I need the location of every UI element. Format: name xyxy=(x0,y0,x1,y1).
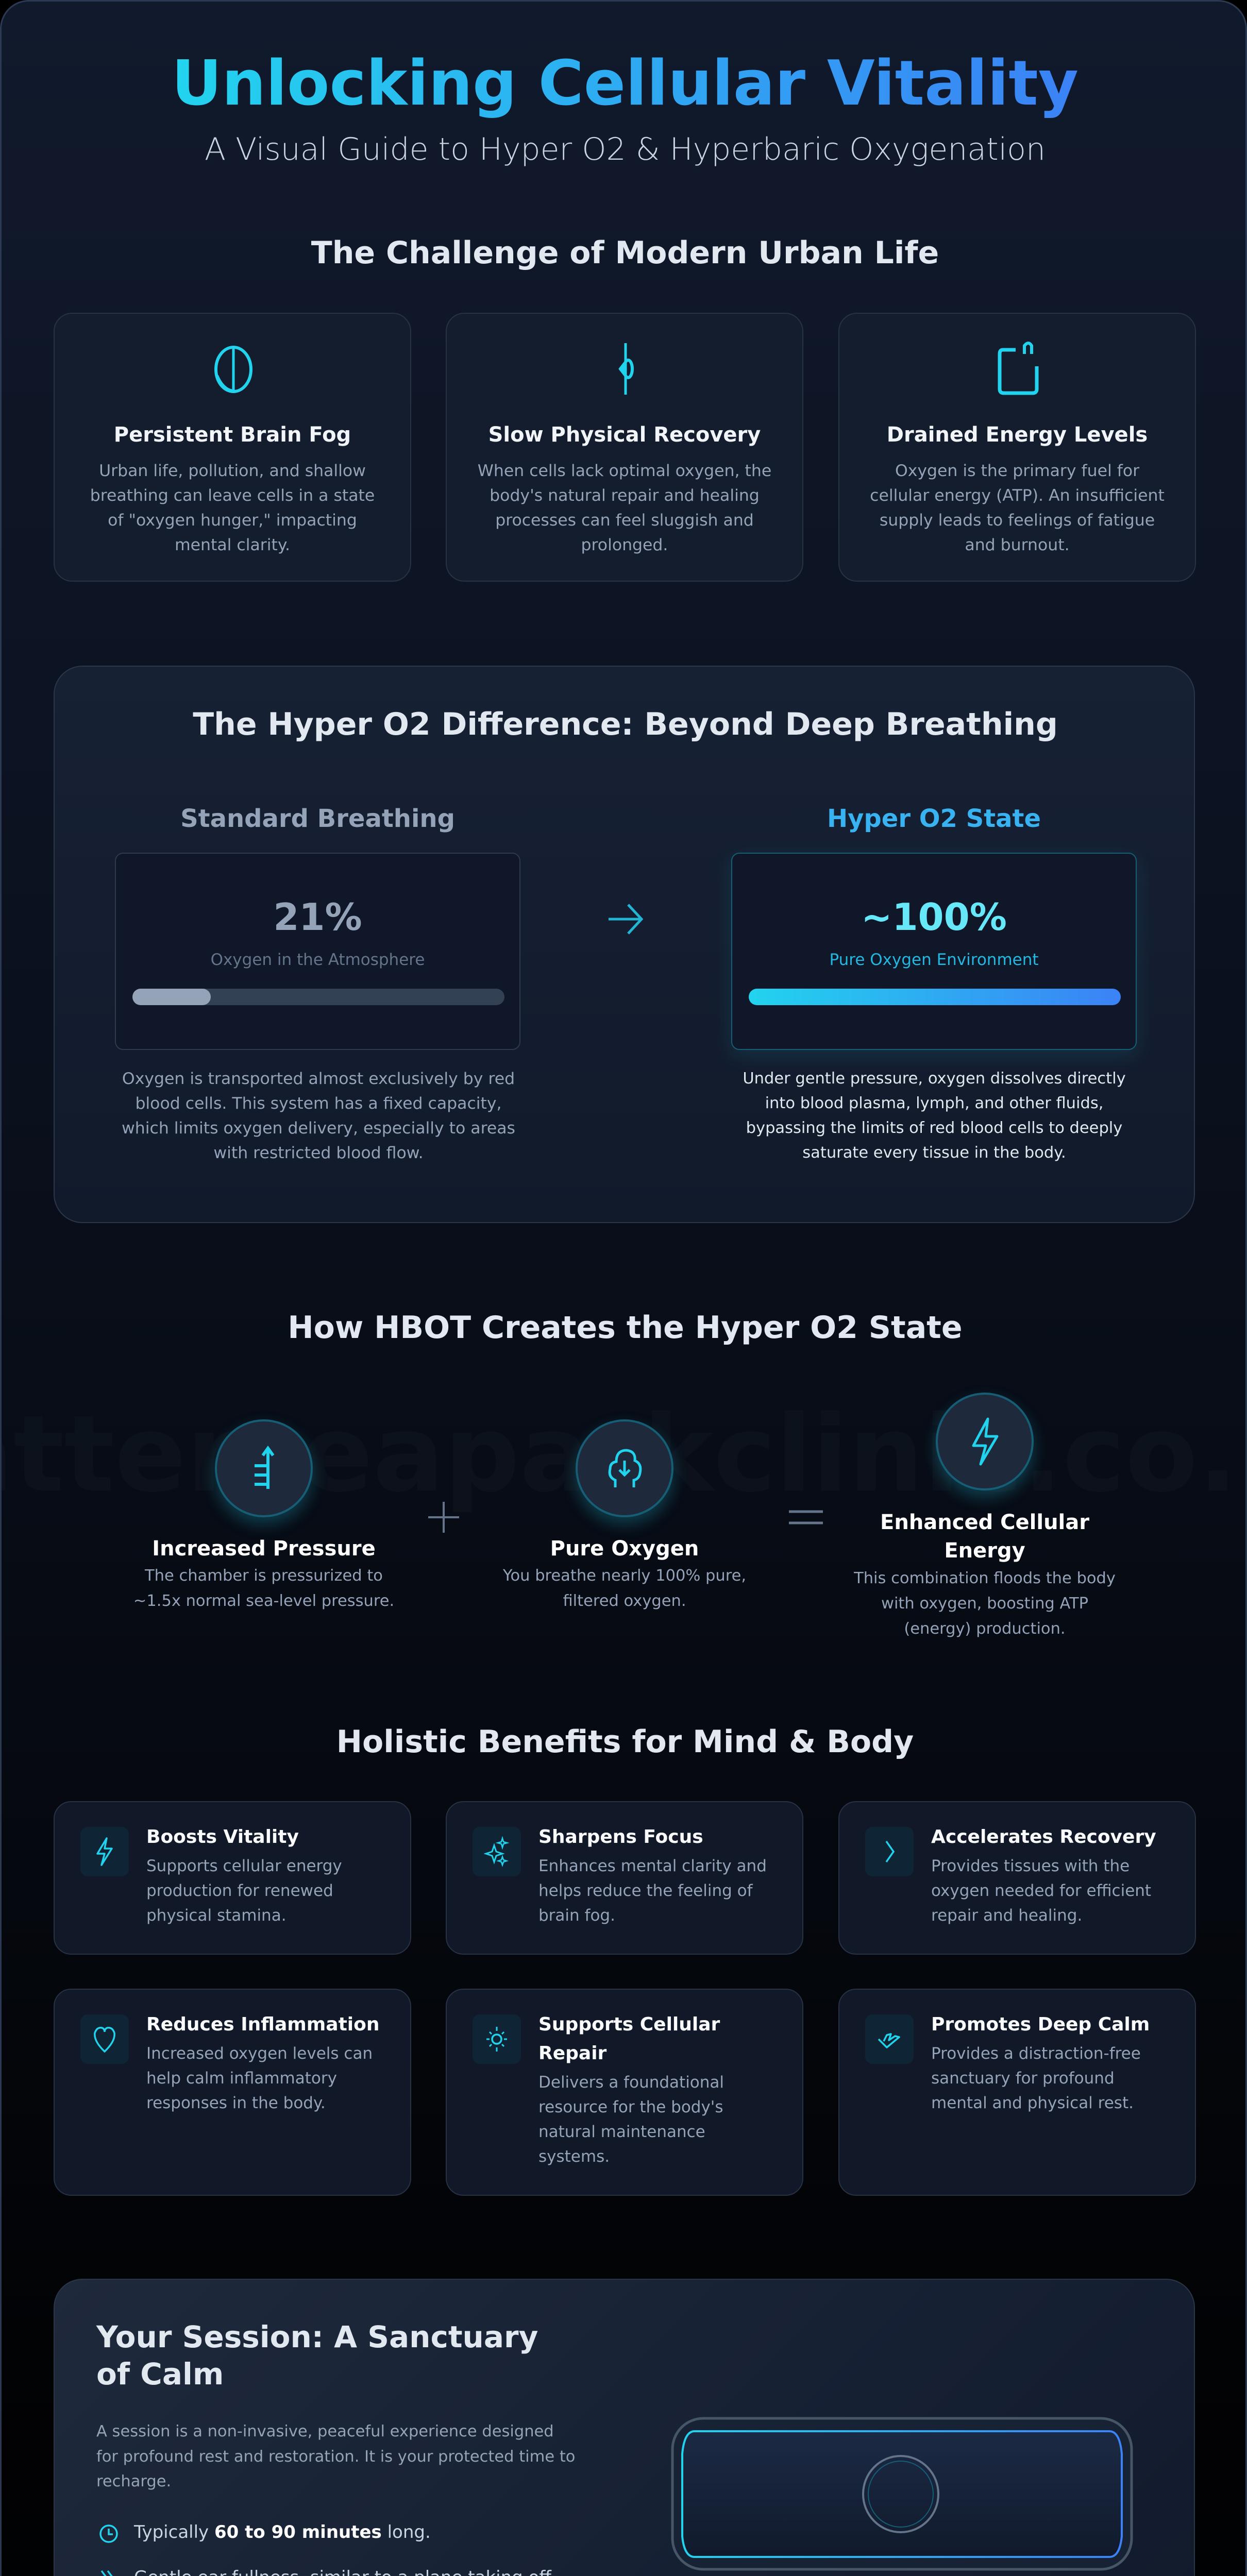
icon: sun xyxy=(473,2014,521,2064)
text: session intro: A session is a non-invasive, peaceful experience designed for profound rest and restoration. It is your protected time to recharge. xyxy=(96,2422,575,2490)
icon: drained battery xyxy=(998,342,1039,395)
step title: Increased Pressure xyxy=(152,1537,376,1561)
benefit: cellular repair xyxy=(446,1989,803,2196)
benefit: recovery xyxy=(838,1801,1196,1955)
benefit text xyxy=(538,2014,724,2166)
step text: This combination floods the body with oxygen, boosting ATP (energy) production. xyxy=(854,1569,1116,1638)
heading: challenge: The Challenge of Modern Urban Life xyxy=(311,235,939,271)
stat box: hyper xyxy=(731,853,1137,1050)
benefit text xyxy=(538,1826,767,1925)
panel: session xyxy=(54,2279,1195,2576)
card title: Persistent Brain Fog xyxy=(114,423,351,447)
step: oxygen xyxy=(503,1419,746,1610)
benefit: inflammation xyxy=(54,1989,411,2196)
icon: clock xyxy=(99,2524,118,2543)
operator: plus xyxy=(428,1502,459,1533)
arrow xyxy=(609,904,643,935)
step title: Pure Oxygen xyxy=(550,1537,699,1561)
heading: difference: The Hyper O2 Difference: Beyond Deep Breathing xyxy=(193,706,1058,742)
title: Unlocking Cellular Vitality xyxy=(172,48,1079,120)
subtitle: A Visual Guide to Hyper O2 & Hyperbaric Oxygenation xyxy=(205,131,1046,167)
card text: When cells lack optimal oxygen, the body's natural repair and healing processes can feel sluggish and prolonged. xyxy=(478,462,771,554)
step text: The chamber is pressurized to ~1.5x normal sea-level pressure. xyxy=(133,1567,394,1610)
benefit text xyxy=(146,1826,342,1925)
benefit: focus xyxy=(446,1801,803,1955)
benefit: vitality xyxy=(54,1801,411,1955)
stat label: Oxygen in the Atmosphere xyxy=(211,951,425,969)
icon: double chevron xyxy=(98,2569,119,2576)
benefit text: Boosts Vitality xyxy=(146,1826,299,1848)
card text: supply leads to feelings of fatigue xyxy=(880,511,1155,530)
card text: Urban life, pollution, and shallow breathing can leave cells in a state of "oxygen hunger," impacting mental clarity. xyxy=(90,462,375,554)
benefit text: mental and physical rest. xyxy=(931,2094,1134,2112)
heading: session: Your Session: A Sanctuary of Calm xyxy=(96,2319,538,2392)
icon: recovery xyxy=(618,343,634,395)
card text: Oxygen is the primary fuel for xyxy=(895,462,1139,480)
panel: hyper o2 difference xyxy=(54,666,1195,1223)
heading: how hbot: How HBOT Creates the Hyper O2 State xyxy=(288,1310,963,1346)
card title: Slow Physical Recovery xyxy=(488,423,761,447)
icon: brain fog xyxy=(214,346,252,393)
benefit text: Provides tissues with the oxygen needed for efficient repair and healing. xyxy=(931,1857,1151,1925)
icon: bolt xyxy=(80,1827,129,1876)
step text: You breathe nearly 100% pure, filtered oxygen. xyxy=(503,1567,746,1610)
benefit text: Reduces Inflammation xyxy=(146,2014,379,2035)
benefit text: Supports Cellular Repair xyxy=(538,2014,720,2064)
step: energy xyxy=(854,1393,1116,1638)
stat label: Pure Oxygen Environment xyxy=(829,951,1039,969)
list item: duration: Typically 60 to 90 minutes long. xyxy=(134,2522,431,2543)
text: hyper: Under gentle pressure, oxygen dissolves directly into blood plasma, lymph, and other fluids, bypassing the limits of red blood cells to deeply saturate every tissue in the body. xyxy=(743,1070,1126,1162)
benefit text xyxy=(931,1826,1156,1925)
benefit text xyxy=(146,2014,379,2112)
icon: chevron xyxy=(865,1827,914,1876)
icon: cloud oxygen xyxy=(576,1419,673,1517)
card text: cellular energy (ATP). An insufficient xyxy=(870,486,1165,505)
card title: Drained Energy Levels xyxy=(887,423,1148,447)
benefit text xyxy=(931,2014,1150,2112)
bar xyxy=(749,989,1121,1005)
benefit text: Increased oxygen levels can help calm inflammatory responses in the body. xyxy=(146,2044,373,2112)
benefit text: Sharpens Focus xyxy=(538,1826,703,1848)
step title: Enhanced Cellular Energy xyxy=(880,1511,1089,1563)
subheading: standard: Standard Breathing xyxy=(180,804,455,833)
stat value: ~100% xyxy=(861,895,1007,939)
benefit text: Provides a distraction-free xyxy=(931,2044,1141,2063)
benefit text: Delivers a foundational resource for the body's natural maintenance systems. xyxy=(538,2073,724,2166)
icon: hand xyxy=(865,2014,914,2064)
card text xyxy=(870,462,1165,554)
benefit text: sanctuary for profound xyxy=(931,2069,1115,2088)
panel: brain fog card xyxy=(54,313,411,582)
card text: and burnout. xyxy=(965,536,1070,554)
list item: ear xyxy=(96,2564,591,2576)
benefit text: Promotes Deep Calm xyxy=(931,2014,1150,2035)
step: pressure xyxy=(133,1419,394,1610)
icon: sparkles xyxy=(473,1827,521,1876)
icon: heart xyxy=(80,2014,129,2064)
benefit: calm xyxy=(838,1989,1196,2196)
icon: lightning xyxy=(936,1393,1034,1490)
stat box: standard xyxy=(115,853,520,1050)
benefit text: Supports cellular energy production for renewed physical stamina. xyxy=(146,1857,342,1925)
icon: pressure xyxy=(215,1419,313,1517)
benefit text: Accelerates Recovery xyxy=(931,1826,1156,1848)
text: standard: Oxygen is transported almost exclusively by red blood cells. This system has a fixed capacity, which limits oxygen delivery, especially to areas with restricted blood flow. xyxy=(122,1070,515,1162)
heading: benefits: Holistic Benefits for Mind & Body xyxy=(336,1724,914,1760)
panel: drained energy card xyxy=(838,313,1196,582)
illustration: chamber xyxy=(666,2413,1140,2576)
stat value: 21% xyxy=(273,895,362,939)
bar xyxy=(132,989,504,1005)
subheading: hyper: Hyper O2 State xyxy=(827,804,1041,833)
operator: equals xyxy=(789,1511,823,1524)
benefit text: Enhances mental clarity and helps reduce the feeling of brain fog. xyxy=(538,1857,767,1925)
panel: slow recovery card xyxy=(446,313,803,582)
